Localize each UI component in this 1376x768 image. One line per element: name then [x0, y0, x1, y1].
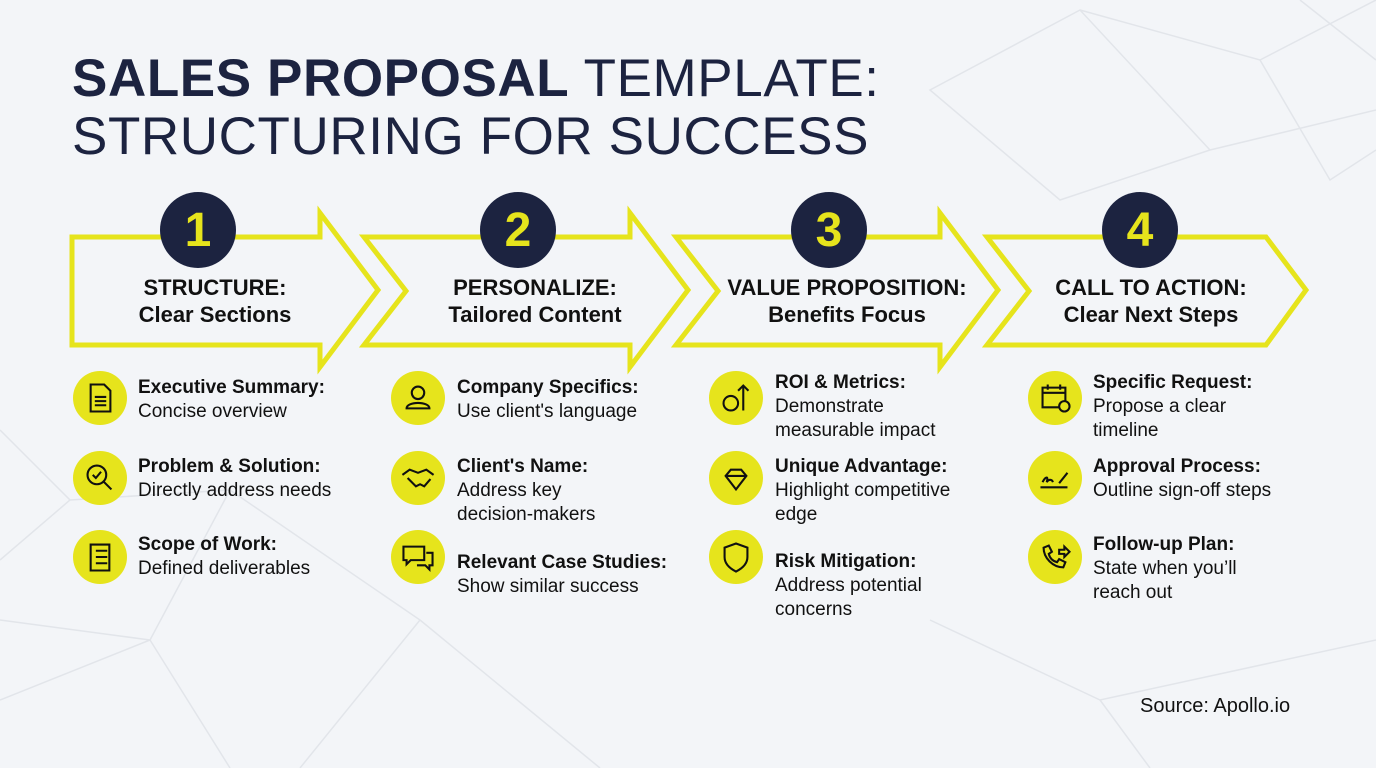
- item: roi: Demonstrate: [775, 396, 884, 417]
- item: unique advantage: Highlight competitive: [775, 480, 950, 501]
- item: risk mitigation: concerns: [775, 599, 852, 620]
- icon: handshake: [391, 451, 445, 505]
- item: approval process: Outline sign-off steps: [1093, 480, 1271, 501]
- icon: signature: [1028, 451, 1082, 505]
- icon: chat: [391, 530, 445, 584]
- item: follow-up plan: [1093, 534, 1237, 603]
- icon: shield: [709, 530, 763, 584]
- item: client's name: Client's Name:: [457, 456, 588, 477]
- item: roi: [775, 372, 936, 441]
- item: follow-up plan: reach out: [1093, 582, 1172, 603]
- item: problem & solution: [138, 456, 331, 501]
- item: scope of work: [138, 534, 310, 579]
- item: case studies: [457, 552, 667, 597]
- step 4 heading: Clear Next Steps: [1064, 302, 1238, 327]
- title: [72, 49, 880, 166]
- item: follow-up plan: Follow-up Plan:: [1093, 534, 1234, 555]
- item: executive summary: Executive Summary:: [138, 377, 325, 398]
- step 1 heading: STRUCTURE:: [144, 275, 286, 300]
- step 2 number: [480, 192, 556, 268]
- step 1 heading: [139, 275, 291, 327]
- item: scope of work: Defined deliverables: [138, 558, 310, 579]
- item: approval process: [1093, 456, 1271, 501]
- item: company specifics: Company Specifics:: [457, 377, 639, 398]
- item: client's name: decision-makers: [457, 504, 595, 525]
- icon: user: [391, 371, 445, 425]
- step 1 number: [160, 192, 236, 268]
- step 4 heading: CALL TO ACTION:: [1055, 275, 1247, 300]
- item: company specifics: [457, 377, 639, 422]
- icon: magnifier: [73, 451, 127, 505]
- step 4 number: [1102, 192, 1178, 268]
- icon: diamond: [709, 451, 763, 505]
- item: unique advantage: edge: [775, 504, 817, 525]
- item: problem & solution: Problem & Solution:: [138, 456, 321, 477]
- item: approval process: Approval Process:: [1093, 456, 1261, 477]
- step 2 heading: [448, 275, 622, 327]
- item: specific request: Specific Request:: [1093, 372, 1252, 393]
- step 2 number: 2: [505, 204, 531, 257]
- icon: coin arrow: [709, 371, 763, 425]
- item: case studies: Show similar success: [457, 576, 639, 597]
- item: executive summary: Concise overview: [138, 401, 287, 422]
- item: roi: ROI & Metrics:: [775, 372, 906, 393]
- step 3 heading: Benefits Focus: [768, 302, 926, 327]
- item: problem & solution: Directly address needs: [138, 480, 331, 501]
- icon: calendar: [1028, 371, 1082, 425]
- step 4 heading: [1055, 275, 1247, 327]
- item: risk mitigation: Address potential: [775, 575, 922, 596]
- item: unique advantage: [775, 456, 950, 525]
- title: STRUCTURING FOR SUCCESS: [72, 107, 869, 166]
- item: scope of work: Scope of Work:: [138, 534, 277, 555]
- item: client's name: [457, 456, 595, 525]
- item: company specifics: Use client's language: [457, 401, 637, 422]
- step 2 heading: PERSONALIZE:: [453, 275, 617, 300]
- item: risk mitigation: Risk Mitigation:: [775, 551, 916, 572]
- icon: phone: [1028, 530, 1082, 584]
- step 3 heading: VALUE PROPOSITION:: [727, 275, 967, 300]
- item: risk mitigation: [775, 551, 922, 620]
- step 2 heading: Tailored Content: [448, 302, 622, 327]
- item: follow-up plan: State when you’ll: [1093, 558, 1237, 579]
- step 1 heading: Clear Sections: [139, 302, 291, 327]
- item: executive summary: [138, 377, 325, 422]
- icon: clipboard: [73, 530, 127, 584]
- step 3 heading: [727, 275, 967, 327]
- item: client's name: Address key: [457, 480, 562, 501]
- item: case studies: Relevant Case Studies:: [457, 552, 667, 573]
- item: roi: measurable impact: [775, 420, 936, 441]
- icon: document: [73, 371, 127, 425]
- step 3 number: 3: [816, 204, 842, 257]
- item: specific request: [1093, 372, 1252, 441]
- title: SALES PROPOSAL TEMPLATE:: [72, 49, 880, 108]
- step 3 number: [791, 192, 867, 268]
- arrows: [70, 206, 1309, 374]
- step 4 number: 4: [1127, 204, 1153, 257]
- step 1 number: 1: [185, 204, 211, 257]
- source: Source: Apollo.io: [1140, 695, 1290, 717]
- item: unique advantage: Unique Advantage:: [775, 456, 947, 477]
- item: specific request: Propose a clear: [1093, 396, 1226, 417]
- item: specific request: timeline: [1093, 420, 1158, 441]
